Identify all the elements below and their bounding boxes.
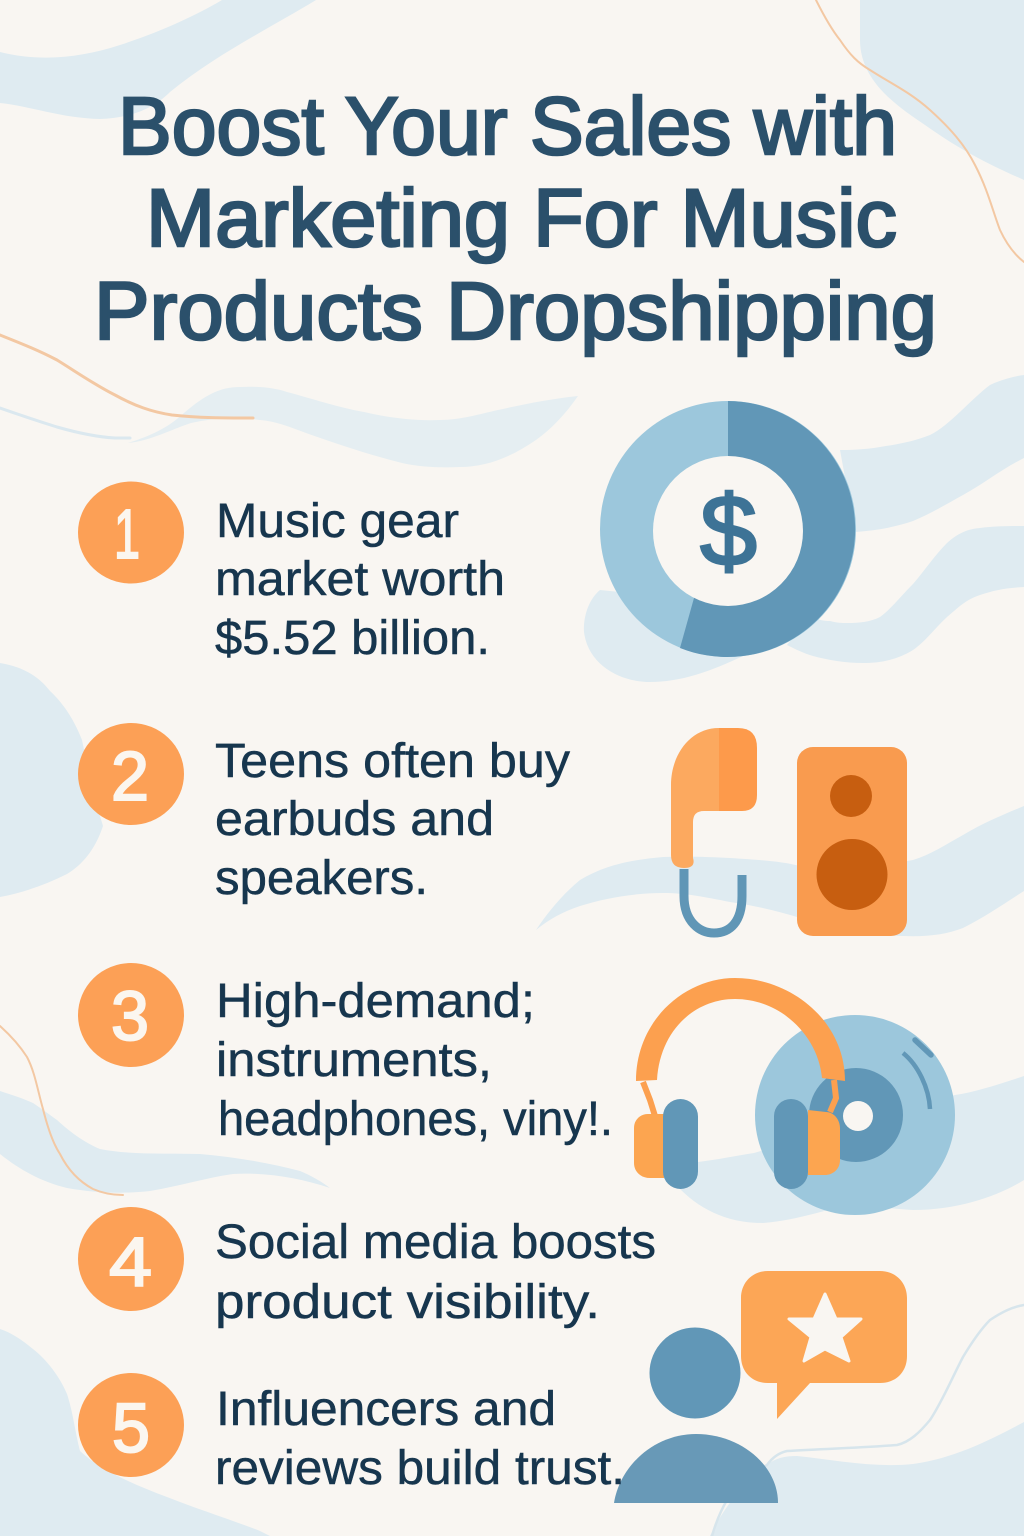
number badge 2: 2 [111,737,149,815]
text 4 [215,1216,656,1329]
icon: donut chart with dollar [600,401,856,657]
text 5 [215,1383,625,1495]
text 3: headphones, viny!. [218,1093,613,1146]
number badge 3: 3 [111,977,149,1055]
text 3 [216,975,613,1146]
text 3: High-demand; [216,975,535,1028]
title [94,81,937,357]
text 2: Teens often buy [215,735,570,788]
number badge 4 [78,1207,184,1311]
person body [614,1434,778,1503]
number badge 1: 1 [114,495,140,573]
title: Boost Your Sales with [118,81,897,172]
text 2: earbuds and [215,793,494,846]
text 2 [215,735,570,905]
number badge 5: 5 [112,1389,150,1467]
text 1: $5.52 billion. [215,612,490,665]
dollar sign: $ [700,475,757,587]
text 5: Influencers and [216,1383,556,1436]
text 4: product visibility. [215,1276,600,1329]
number badge 3 [78,963,184,1067]
number badge 4: 4 [109,1223,152,1301]
item 2 [78,723,570,905]
item 3 [78,963,613,1146]
item 5 [78,1373,625,1495]
icon: speaker [797,747,907,936]
person head [650,1328,740,1418]
star [789,1294,861,1361]
text 4: Social media boosts [215,1216,656,1269]
text 1 [215,495,505,665]
text 5: reviews build trust. [215,1442,625,1495]
item 1 [78,482,505,665]
text 1: Music gear [216,495,459,548]
text 1: market worth [215,553,505,606]
icon: earbud [671,728,757,933]
number badge 2 [78,723,184,825]
item 4 [78,1207,656,1329]
text 2: speakers. [215,852,428,905]
number badge 1 [78,482,184,584]
icon: person with review bubble [614,1271,907,1503]
title: Marketing For Music [146,173,897,264]
icon: headphones [634,978,845,1189]
earbud cable [684,869,742,933]
text 3: instruments, [216,1034,492,1087]
title: Products Dropshipping [94,266,937,357]
icon: vinyl record [755,1015,955,1215]
speech bubble [741,1271,907,1419]
number badge 5 [78,1373,184,1477]
